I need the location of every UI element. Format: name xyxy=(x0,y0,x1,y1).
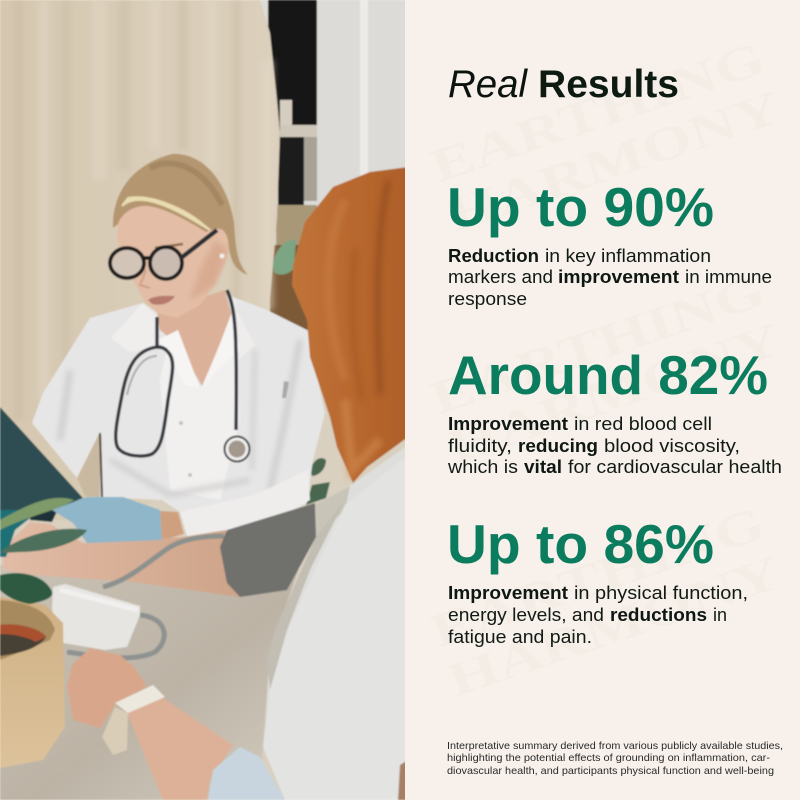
patient's lower arm xyxy=(127,698,233,800)
stat description: Reduction xyxy=(448,245,539,266)
patient's shirt xyxy=(208,445,408,800)
stat description: markers and xyxy=(448,266,553,287)
stat description: in immune xyxy=(685,266,772,287)
stat description: for cardiovascular health xyxy=(568,456,782,477)
stat description: Improvement xyxy=(448,582,568,603)
watermark top xyxy=(425,32,787,242)
icon: stethoscope xyxy=(116,290,250,462)
plant leaf xyxy=(0,529,87,553)
stat block: around 82% xyxy=(447,345,782,477)
patient's forearm xyxy=(3,522,240,597)
stat description: improvement xyxy=(558,266,679,287)
table xyxy=(0,565,300,800)
stat description: in red blood cell xyxy=(574,413,712,434)
stethoscope chest piece xyxy=(224,436,250,462)
wall and window background xyxy=(260,0,408,340)
patient's hand xyxy=(67,648,147,728)
watermark: Earthing Harmony repeated xyxy=(425,32,787,707)
watermark top: EARTHING xyxy=(425,32,771,193)
stat description: response xyxy=(448,288,527,309)
stat description: in xyxy=(713,604,727,625)
stat description: Improvement xyxy=(448,413,568,434)
watermark middle: HARMONY xyxy=(442,313,787,474)
doctor's shirt collar xyxy=(158,312,240,388)
stat description: fatigue and pain. xyxy=(448,626,592,647)
doctor's hair xyxy=(113,154,248,275)
panel: photo of doctor measuring patient's blood pressure xyxy=(0,0,408,800)
doctor's face xyxy=(117,190,231,318)
stat description: fluidity, xyxy=(448,435,512,456)
stat block: up to 90% xyxy=(447,177,772,309)
watermark bottom: HARMONY xyxy=(442,546,787,707)
doctor's neck xyxy=(157,290,232,386)
plant leaf dark xyxy=(0,573,52,604)
blood pressure cuff xyxy=(220,503,316,597)
doctor's wrist xyxy=(160,511,184,540)
title: Results xyxy=(538,63,679,106)
woven basket xyxy=(0,597,65,768)
stat description: in physical function, xyxy=(574,582,748,603)
icon: background plant leaf xyxy=(273,240,296,275)
watermark bottom xyxy=(425,497,787,707)
doctor's facial features xyxy=(118,244,224,305)
doctor's coat xyxy=(32,295,325,536)
stat description xyxy=(447,413,782,477)
stat heading: Around 82% xyxy=(448,345,768,406)
photo base fill xyxy=(0,0,408,800)
stat description: energy levels, and xyxy=(448,604,604,625)
blood pressure monitor xyxy=(52,584,164,658)
stat description xyxy=(448,245,772,309)
footnote: Interpretative summary derived from various publicly available studies, xyxy=(447,741,783,752)
icon: glasses xyxy=(110,230,217,279)
title xyxy=(448,63,679,106)
stat description: reducing xyxy=(518,435,598,456)
stat description xyxy=(448,582,748,647)
patient's red hair xyxy=(292,167,408,483)
stat description: vital xyxy=(524,456,562,477)
stat description: in key inflammation xyxy=(545,245,711,266)
stat description: which is xyxy=(447,456,518,477)
watermark middle: EARTHING xyxy=(425,264,771,425)
footnote: diovascular health, and participants physical function and well-being xyxy=(447,766,774,777)
footnote: highlighting the potential effects of grounding on inflammation, car- xyxy=(447,753,770,764)
watermark middle xyxy=(425,264,787,474)
stat block: up to 86% xyxy=(447,514,748,647)
watermark top: HARMONY xyxy=(442,81,787,242)
title: Real xyxy=(448,63,528,106)
stat description: blood viscosity, xyxy=(604,435,740,456)
watermark bottom: EARTHING xyxy=(425,497,771,658)
doctor's glove xyxy=(52,497,162,543)
stat description: reductions xyxy=(610,604,707,625)
stat heading: Up to 86% xyxy=(447,514,714,575)
panel: text background xyxy=(405,0,800,800)
curtain xyxy=(0,0,300,520)
leaf on folder xyxy=(0,498,74,530)
stat heading: Up to 90% xyxy=(447,177,714,238)
small plant by coat xyxy=(306,458,330,505)
patient's watch xyxy=(102,685,165,755)
tube to cuff xyxy=(103,536,224,587)
footnote xyxy=(447,741,783,777)
folder xyxy=(0,407,83,557)
